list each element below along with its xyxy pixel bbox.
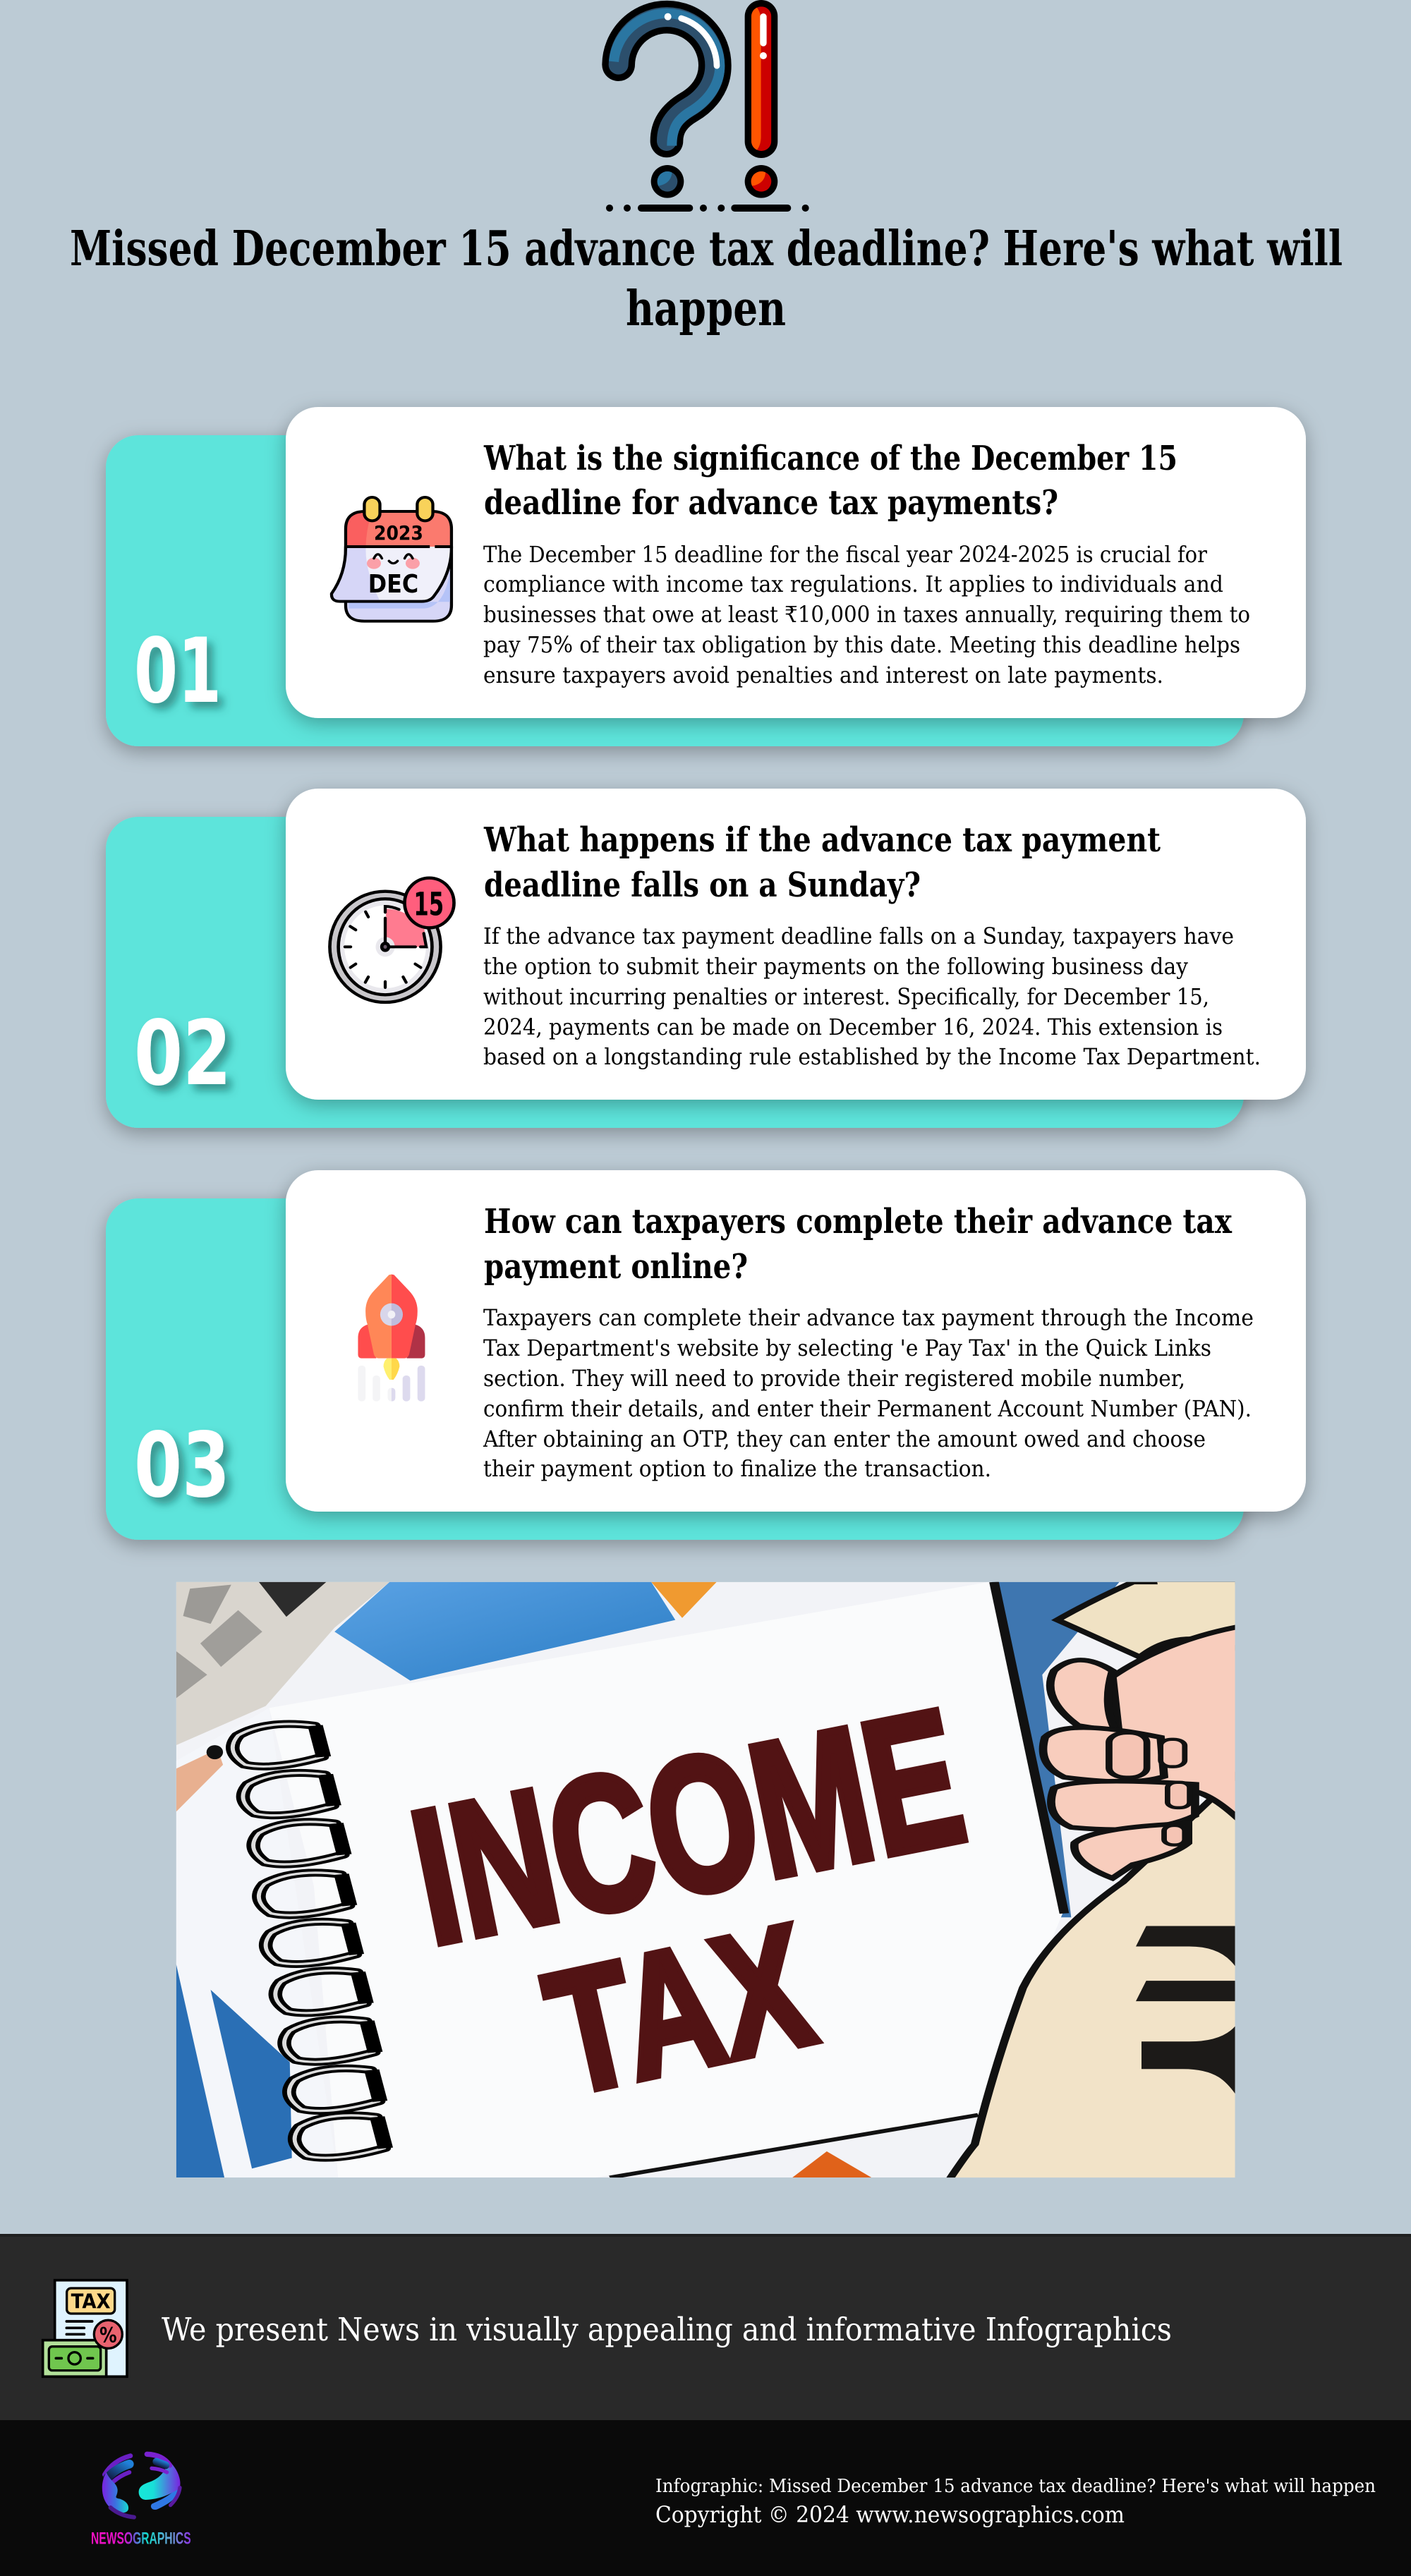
icon: calendar: DEC xyxy=(368,569,418,599)
tagline text: We present News in visually appealing and informative Infographics xyxy=(162,2311,1172,2348)
heading 3: payment online? xyxy=(484,1247,748,1287)
content card 03 xyxy=(286,1170,1306,1512)
heading 2 xyxy=(483,820,1161,905)
logo: Newsographics xyxy=(91,2454,191,2548)
panel: question 3 xyxy=(106,1170,1306,1540)
number 01: 01 xyxy=(134,619,222,723)
body text 2: without incurring penalties or interest. Specifically, for December 15, xyxy=(483,985,1209,1010)
footer band: tagline xyxy=(0,2234,1411,2420)
body text 3: After obtaining an OTP, they can enter the amount owed and choose xyxy=(483,1427,1206,1452)
body text 1: The December 15 deadline for the fiscal year 2024-2025 is crucial for xyxy=(483,542,1208,568)
body text 2: the option to submit their payments on the following business day xyxy=(483,954,1188,980)
photo symbol: rupee on the bag: ₹ xyxy=(1116,1859,1361,2254)
body text 1 xyxy=(483,542,1250,688)
credit line: Infographic: Missed December 15 advance tax deadline? Here's what will happen xyxy=(655,2476,1376,2497)
number 03: 03 xyxy=(134,1413,230,1517)
content card 01 xyxy=(286,407,1306,718)
icon: tax document with money: TAX xyxy=(71,2290,111,2314)
body text 2: based on a longstanding rule established by the Income Tax Department. xyxy=(483,1045,1261,1070)
body text 3: Taxpayers can complete their advance tax payment through the Income xyxy=(483,1306,1254,1331)
panel: question 1 xyxy=(106,407,1306,746)
heading 1: What is the significance of the December 15 xyxy=(483,439,1177,478)
number card 03 xyxy=(106,1198,1244,1540)
heading 2: What happens if the advance tax payment xyxy=(483,820,1161,860)
heading 3: How can taxpayers complete their advance tax xyxy=(484,1202,1232,1241)
body text 3: Tax Department's website by selecting 'e Pay Tax' in the Quick Links xyxy=(483,1336,1211,1361)
body text 3: section. They will need to provide their registered mobile number, xyxy=(483,1366,1185,1392)
icon: calendar: 2023 xyxy=(374,522,423,545)
title xyxy=(70,221,1343,337)
icon: tax document with money: % xyxy=(99,2323,117,2347)
body text 2: If the advance tax payment deadline falls on a Sunday, taxpayers have xyxy=(483,924,1234,949)
heading 2: deadline falls on a Sunday? xyxy=(484,865,921,905)
content card 02 xyxy=(286,789,1306,1100)
photo: income tax notebook and money bag xyxy=(176,1581,1235,2178)
heading 1 xyxy=(483,439,1177,523)
icon: clock with 15 badge: 15 xyxy=(413,886,444,923)
logo: Newsographics: NEWSOGRAPHICS xyxy=(91,2529,191,2548)
body text 3 xyxy=(483,1306,1254,1482)
heading 3 xyxy=(484,1202,1232,1287)
body text 2: 2024, payments can be made on December 16, 2024. This extension is xyxy=(483,1015,1223,1040)
number card 02 xyxy=(106,817,1244,1128)
body text 3: their payment option to finalize the transaction. xyxy=(483,1457,991,1482)
icon: tax document with money xyxy=(43,2280,127,2376)
title: happen xyxy=(626,281,786,337)
body text 2 xyxy=(483,924,1261,1070)
body text 1: ensure taxpayers avoid penalties and interest on late payments. xyxy=(483,663,1163,688)
panel: question 2 xyxy=(106,789,1306,1128)
photo text: TAX: TAX xyxy=(531,1887,828,2132)
body text 1: businesses that owe at least ₹10,000 in taxes annually, requiring them to xyxy=(483,602,1250,628)
icon: clock with 15 badge xyxy=(329,878,454,1002)
body text 1: compliance with income tax regulations. It applies to individuals and xyxy=(483,572,1223,597)
number 02: 02 xyxy=(134,1001,231,1105)
body text 1: pay 75% of their tax obligation by this date. Meeting this deadline helps xyxy=(483,633,1240,658)
body text 3: confirm their details, and enter their Permanent Account Number (PAN). xyxy=(483,1397,1252,1422)
copyright line: Copyright © 2024 www.newsographics.com xyxy=(655,2503,1125,2528)
number card 01 xyxy=(106,435,1244,746)
icon: calendar xyxy=(332,497,452,621)
icon: rocket xyxy=(358,1275,425,1402)
heading 1: deadline for advance tax payments? xyxy=(484,483,1058,523)
icon: question mark and exclamation mark xyxy=(606,0,809,212)
footer band: credits xyxy=(0,2420,1411,2576)
photo text: INCOME: INCOME xyxy=(397,1669,979,1986)
